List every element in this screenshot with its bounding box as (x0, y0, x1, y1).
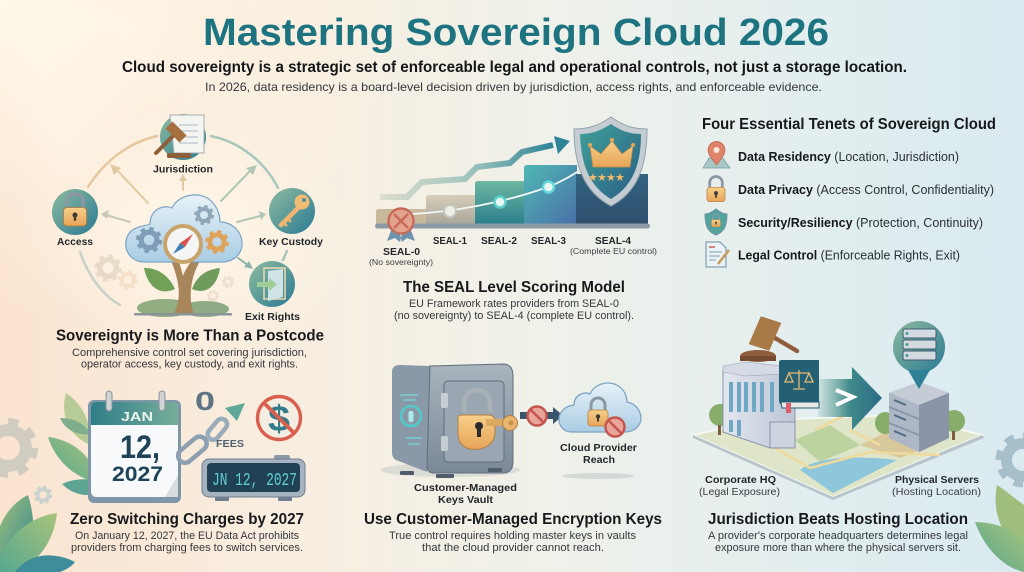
icon: SEAL-4 crown shield: ★ (597, 172, 607, 184)
decoration: bottom-left gears and leaves (0, 424, 75, 572)
tenet: data privacy (707, 176, 994, 202)
level labels: (No sovereignty) (369, 257, 433, 267)
label: physical servers: Physical Servers (895, 474, 979, 486)
icon: cloud provider with lock (559, 383, 641, 436)
label: corporate HQ (699, 474, 780, 498)
description: operator access, key custody, and exit rights. (81, 358, 298, 370)
heading: Jurisdiction Beats Hosting Location (708, 511, 968, 528)
label: fees: FEES (216, 439, 244, 450)
icon: calendar (88, 391, 181, 503)
icon: calendar: 2027 (112, 463, 163, 486)
icon: jurisdiction (156, 114, 206, 160)
tenet: security and resiliency (705, 209, 983, 235)
description: A provider's corporate headquarters determines legal (708, 530, 968, 542)
label: cloud provider reach (560, 442, 637, 466)
heading: Four Essential Tenets of Sovereign Cloud (702, 116, 996, 133)
icon: safe vault (380, 364, 520, 478)
description: True control requires holding master keys in vaults (389, 530, 636, 542)
label: physical servers: (Hosting Location) (892, 487, 981, 498)
icon: exit rights door (249, 261, 295, 307)
digital clock (202, 455, 305, 501)
label: corporate HQ: (Legal Exposure) (699, 487, 780, 498)
icon: server stack with pin (889, 321, 949, 452)
map (693, 404, 984, 500)
description (389, 530, 636, 554)
level labels (369, 235, 657, 267)
growth arrow (380, 136, 570, 197)
icon: SEAL-4 crown shield: ★ (588, 172, 598, 184)
level labels: SEAL-3 (531, 235, 566, 247)
panel: jurisdiction beats hosting location (693, 315, 984, 554)
description (72, 347, 307, 370)
blocked arrow (520, 406, 563, 426)
description: On January 12, 2027, the EU Data Act prohibits (75, 530, 299, 542)
description: (no sovereignty) to SEAL-4 (complete EU control). (394, 310, 634, 322)
label: cloud provider reach: Reach (583, 454, 615, 466)
description (394, 298, 634, 322)
description: providers from charging fees to switch services. (71, 542, 303, 554)
description (708, 530, 968, 554)
zero fees: 0 (195, 386, 215, 416)
label: access: Access (57, 236, 93, 248)
tenet: data privacy: Data Privacy (Access Control, Confidentiality) (738, 182, 994, 197)
heading: The SEAL Level Scoring Model (403, 279, 625, 296)
digital clock: JN 12, 2027 (212, 471, 297, 491)
label: cloud provider reach: Cloud Provider (560, 442, 637, 454)
icon: no dollar sign: $ (268, 398, 290, 439)
tenet: security and resiliency: Security/Resiliency (Protection, Continuity) (738, 215, 983, 230)
tenet: data residency: Data Residency (Location, Jurisdiction) (738, 149, 959, 164)
panel: customer-managed encryption keys (364, 364, 662, 554)
tree (134, 258, 232, 317)
heading: Zero Switching Charges by 2027 (70, 511, 304, 528)
panel: four essential tenets (702, 116, 996, 267)
icon: corporate HQ building with gavel (723, 315, 797, 448)
shadow (562, 473, 634, 479)
label: physical servers (892, 474, 981, 498)
icon: calendar: 12, (120, 429, 160, 465)
description: exposure more than where the physical servers sit. (715, 542, 961, 554)
decoration: bottom-right gear and leaves (975, 438, 1024, 572)
icon: calendar: JAN (121, 409, 153, 424)
level labels: SEAL-4 (595, 235, 631, 247)
icon: broken chain with arrow (175, 403, 245, 466)
panel: sovereignty is more than a postcode (52, 114, 324, 370)
description: Comprehensive control set covering jurisdiction, (72, 347, 307, 359)
label: corporate HQ: Corporate HQ (705, 474, 776, 486)
tenet: data residency (703, 142, 959, 168)
description: that the cloud provider cannot reach. (422, 542, 604, 554)
level labels: (Complete EU control) (570, 246, 657, 256)
heading: Use Customer-Managed Encryption Keys (364, 511, 662, 528)
label: customer-managed keys vault: Customer-Managed (414, 482, 517, 494)
level labels: SEAL-0 (383, 246, 420, 258)
panel: SEAL level scoring model (369, 117, 657, 322)
background leaves (48, 393, 96, 495)
description: EU Framework rates providers from SEAL-0 (409, 298, 619, 310)
icon: SEAL-4 crown shield (574, 117, 647, 206)
label: customer-managed keys vault: Keys Vault (438, 494, 494, 506)
intro text: In 2026, data residency is a board-level decision driven by jurisdiction, access rights, and enforceable evidence. (205, 80, 822, 94)
faded gears (97, 257, 233, 301)
tenet: legal control: Legal Control (Enforceable Rights, Exit) (738, 248, 960, 262)
icon: no dollar sign (258, 396, 300, 440)
description (71, 530, 303, 554)
icon: SEAL-0 no sovereignty badge (387, 208, 415, 242)
level labels: SEAL-1 (433, 235, 467, 247)
label: key custody: Key Custody (259, 236, 323, 248)
cloud with compass (126, 195, 242, 264)
bar chart: SEAL levels (375, 165, 650, 228)
icon: key custody (269, 188, 315, 234)
big arrow with greater-than sign (818, 367, 882, 430)
label: customer-managed keys vault (414, 482, 517, 506)
tenet: legal control (706, 242, 960, 267)
title: Mastering Sovereign Cloud 2026 (203, 12, 829, 54)
icon: access padlock (52, 189, 98, 235)
heading: Sovereignty is More Than a Postcode (56, 328, 324, 344)
subtitle: Cloud sovereignty is a strategic set of enforceable legal and operational controls, not just a storage location. (122, 59, 907, 76)
icon: SEAL-4 crown shield: ★ (606, 172, 616, 184)
label: jurisdiction: Jurisdiction (153, 164, 213, 176)
panel: zero switching charges (48, 386, 305, 554)
icon: SEAL-4 crown shield: ★ (615, 172, 625, 184)
level labels: SEAL-2 (481, 235, 517, 247)
icon: law book with scales (779, 360, 819, 413)
label: exit rights: Exit Rights (245, 311, 300, 323)
orbit arcs and arrows (80, 136, 287, 305)
